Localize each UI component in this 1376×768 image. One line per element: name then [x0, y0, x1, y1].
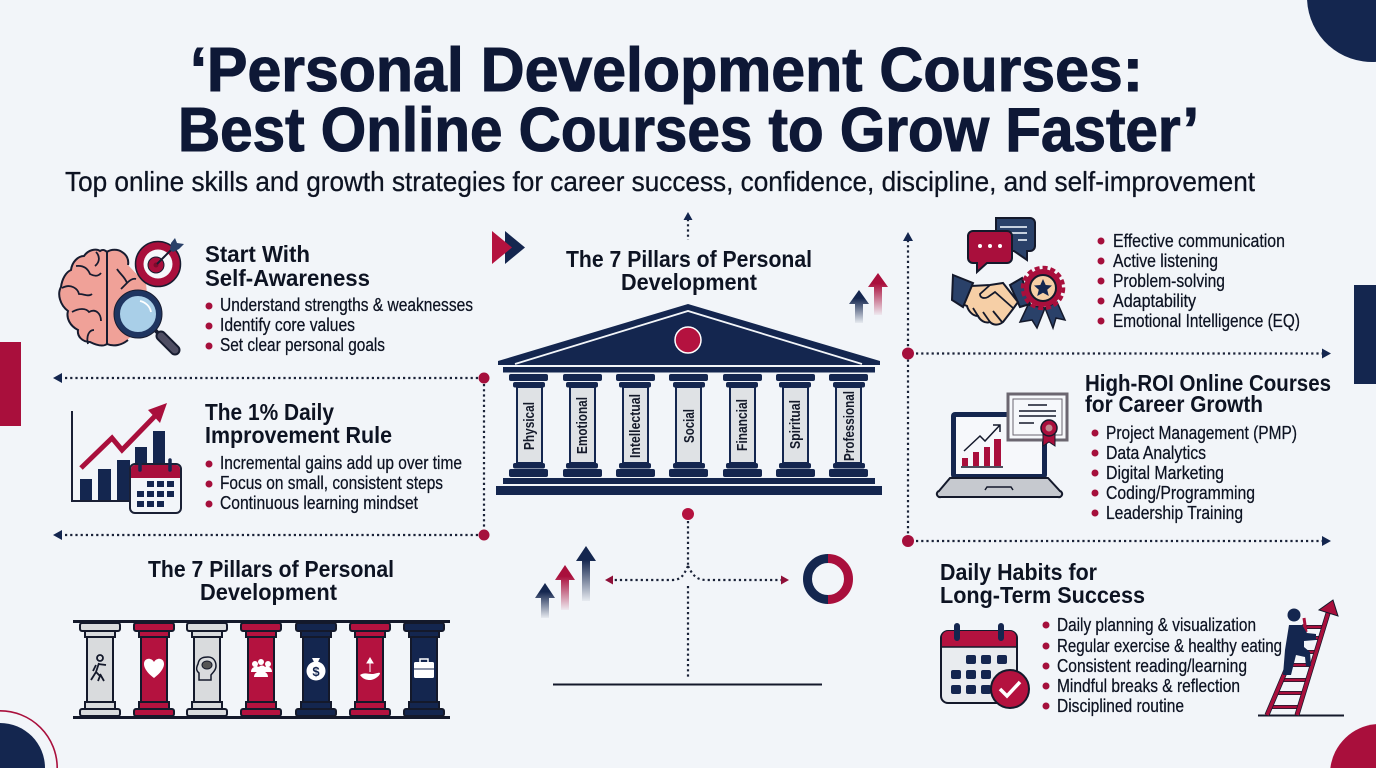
bullet list [1092, 423, 1297, 523]
bullet list: Project Management (PMP) [1106, 423, 1297, 443]
pillar: intellectual [616, 374, 655, 477]
pillar: intellectual [187, 623, 227, 716]
connector: lower centre branches [553, 508, 822, 684]
heading: Start With [205, 241, 310, 267]
pillar: physical: Physical [522, 402, 538, 450]
icon: growth chart with calendar [72, 403, 181, 513]
panel: soft skills [952, 218, 1300, 331]
bullet list: Set clear personal goals [220, 335, 385, 355]
roof [498, 304, 880, 372]
pillar beams [73, 620, 450, 719]
pillar: physical [80, 623, 120, 716]
panel: start with self-awareness [59, 238, 473, 355]
icon: double chevrons [492, 231, 525, 264]
icon: calendar with check [941, 626, 1029, 708]
corner circle: top right [1307, 0, 1376, 62]
pillar: professional: Professional [842, 391, 858, 461]
bullet list: Daily planning & visualization [1057, 615, 1256, 635]
icon: two-tone ring [808, 558, 848, 600]
heading: High-ROI Online Courses [1085, 370, 1331, 396]
corner circle: bottom right [1330, 724, 1376, 768]
heading: centre: Development [621, 269, 757, 295]
bullet list: Understand strengths & weaknesses [220, 295, 473, 315]
icon: rising arrows near temple [849, 273, 888, 323]
pillar: spiritual [350, 623, 390, 716]
heading: Daily Habits for [940, 559, 1097, 585]
pillar: emotional [134, 623, 174, 716]
pillar: emotional: Emotional [575, 397, 591, 454]
bullet list: Incremental gains add up over time [220, 453, 462, 473]
heading [205, 399, 392, 448]
heading: Improvement Rule [205, 422, 392, 448]
pillar: professional [404, 623, 444, 716]
heading [940, 559, 1145, 608]
bullet list: Regular exercise & healthy eating [1057, 636, 1282, 656]
temple base [496, 478, 882, 495]
pillar: professional [829, 374, 868, 477]
panel: 7 pillars colour row [73, 556, 450, 719]
bullet list: Mindful breaks & reflection [1057, 676, 1240, 696]
bullet list: Effective communication [1113, 231, 1285, 251]
bullet list [1098, 231, 1300, 331]
bullet list: Disciplined routine [1057, 696, 1184, 716]
heading: Development [200, 579, 337, 605]
subtitle: Top online skills and growth strategies for career success, confidence, discipline, and self-improvement [65, 166, 1255, 197]
pillar: social [241, 623, 281, 716]
pillar: social [669, 374, 708, 477]
bullet list: Coding/Programming [1106, 483, 1255, 503]
panel: high-roi courses [937, 370, 1331, 523]
arrow: top centre dotted [684, 212, 692, 240]
heading: for Career Growth [1085, 391, 1263, 417]
pillar: spiritual [776, 374, 815, 477]
icon: three rising arrows [535, 546, 596, 618]
bullet list: Leadership Training [1106, 503, 1243, 523]
pillar: financial: Financial [735, 399, 751, 451]
heading: centre [566, 246, 812, 295]
icon: laptop with certificate [937, 394, 1067, 497]
heading: Self-Awareness [205, 265, 370, 291]
bullet list [206, 295, 473, 355]
title: ‘Personal Development Courses: [190, 36, 1143, 105]
panel: 1% daily improvement rule [72, 399, 462, 513]
pillar: intellectual: Intellectual [628, 394, 644, 458]
icon: brain target magnifier [59, 238, 184, 350]
bullet list: Adaptability [1113, 291, 1196, 311]
icon: chat bubbles handshake and badge [952, 218, 1065, 328]
heading: centre: The 7 Pillars of Personal [566, 246, 812, 272]
pillar: financial [723, 374, 762, 477]
connector: left dotted lines [53, 372, 490, 540]
bullet list: Focus on small, consistent steps [220, 473, 443, 493]
pillar: financial: $ [312, 664, 320, 679]
heading [148, 556, 394, 605]
corner circle: bottom left [0, 711, 57, 768]
bullet list: Active listening [1113, 251, 1218, 271]
pillar: financial [296, 623, 336, 716]
bullet list: Identify core values [220, 315, 355, 335]
bullet list: Emotional Intelligence (EQ) [1113, 311, 1300, 331]
pillar: physical [509, 374, 548, 477]
bullet list: Continuous learning mindset [220, 493, 418, 513]
pillar: social: Social [682, 409, 698, 443]
bullet list: Digital Marketing [1106, 463, 1224, 483]
title [178, 36, 1199, 165]
panel: daily habits [940, 559, 1344, 716]
bullet list [206, 453, 462, 513]
title: Best Online Courses to Grow Faster’ [178, 96, 1199, 165]
bullet list [1042, 615, 1282, 716]
pillar: spiritual: Spiritual [788, 400, 804, 449]
heading [1085, 370, 1331, 417]
heading: The 1% Daily [205, 399, 334, 425]
side bar: right navy [1354, 285, 1376, 384]
bullet list: Consistent reading/learning [1057, 656, 1247, 676]
heading [205, 241, 370, 291]
connector: right dotted lines [902, 232, 1331, 547]
heading: Long-Term Success [940, 582, 1145, 608]
bullet list: Problem-solving [1113, 271, 1225, 291]
heading: The 7 Pillars of Personal [148, 556, 394, 582]
temple diagram [496, 304, 882, 495]
side bar: left crimson [0, 342, 21, 426]
pillar: emotional [563, 374, 602, 477]
icon: person climbing ladder [1258, 600, 1344, 716]
bullet list: Data Analytics [1106, 443, 1206, 463]
